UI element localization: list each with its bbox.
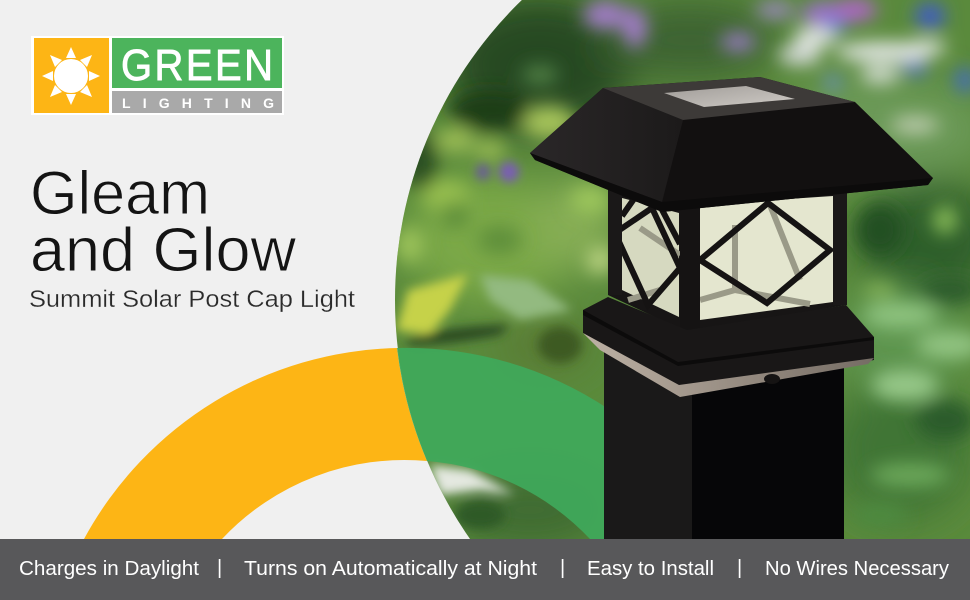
roof <box>530 77 933 212</box>
bottom bar: No Wires Necessary <box>765 558 949 580</box>
solar panel <box>664 86 795 107</box>
product: solar post cap light <box>530 77 933 540</box>
green arc <box>397 348 610 539</box>
post <box>604 350 844 540</box>
bottom bar: | <box>560 557 565 579</box>
base <box>583 297 874 397</box>
title <box>30 159 296 285</box>
bottom bar <box>0 539 970 600</box>
subtitle: Summit Solar Post Cap Light <box>29 286 355 313</box>
icon: sun <box>42 47 100 105</box>
logo <box>31 36 284 115</box>
title: Gleam <box>30 159 210 227</box>
logo: GREEN <box>121 40 273 89</box>
bottom bar: | <box>217 557 222 579</box>
bottom bar: Easy to Install <box>587 558 714 580</box>
bottom bar: Turns on Automatically at Night <box>244 558 537 580</box>
bottom bar: | <box>737 557 742 579</box>
lantern cage <box>608 190 847 332</box>
title: and Glow <box>30 216 296 285</box>
logo: LIGHTING <box>122 95 274 111</box>
bottom bar: Charges in Daylight <box>19 558 199 580</box>
yellow arc <box>84 348 427 539</box>
photo: blurred garden <box>390 0 970 550</box>
